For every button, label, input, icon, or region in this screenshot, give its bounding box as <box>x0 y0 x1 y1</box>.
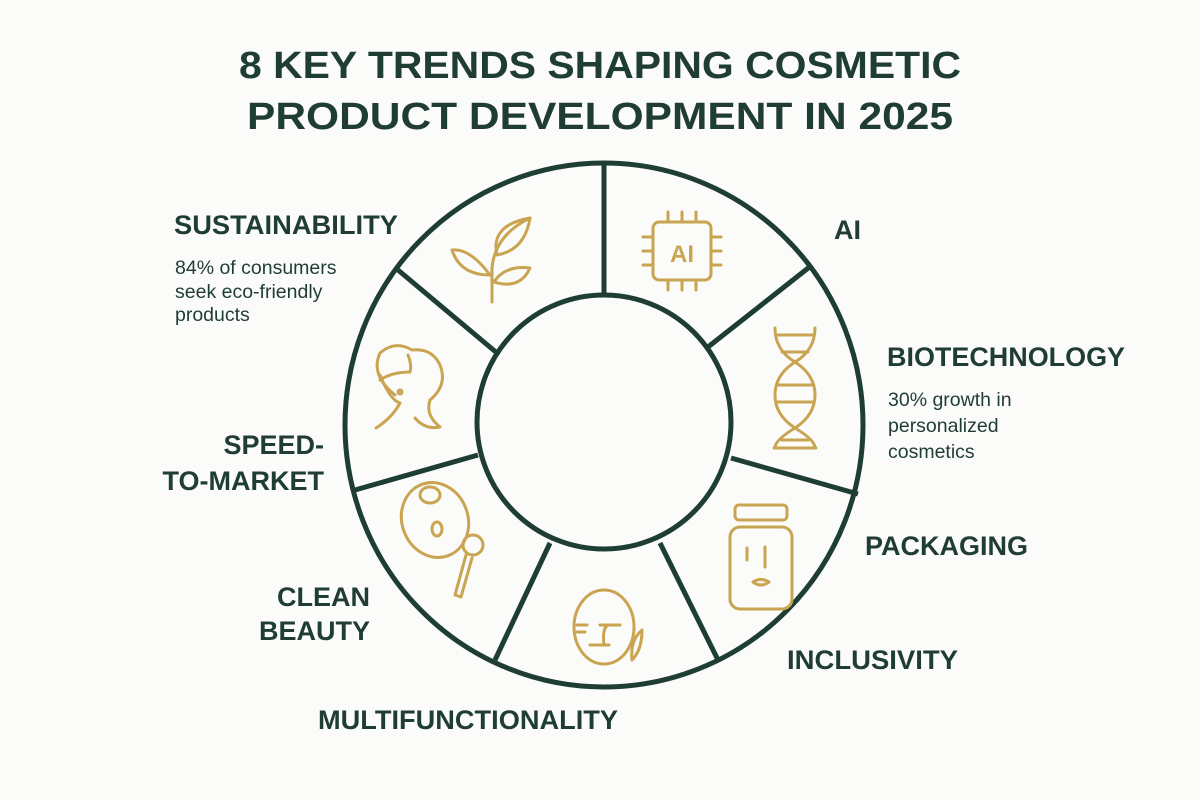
label: sustainability: 84% of consumers <box>175 257 337 279</box>
label: biotechnology <box>887 342 1125 463</box>
label: biotechnology: BIOTECHNOLOGY <box>887 342 1125 372</box>
icon: AI chip: AI <box>670 241 694 268</box>
icon: AI chip <box>643 212 721 290</box>
label: sustainability: seek eco-friendly <box>175 281 323 303</box>
ring diagram <box>345 163 863 687</box>
icon: woman <box>376 346 442 428</box>
icon: mask & brush <box>391 473 483 597</box>
label: clean beauty <box>259 582 370 646</box>
title <box>239 45 961 138</box>
icon: jar <box>730 505 792 609</box>
label: AI: AI <box>834 215 861 245</box>
icon: face <box>574 590 642 664</box>
label: speed-to-market <box>162 430 324 496</box>
label: clean beauty: BEAUTY <box>259 616 370 646</box>
label: multifunctionality: MULTIFUNCTIONALITY <box>318 705 618 735</box>
title: 8 KEY TRENDS SHAPING COSMETIC <box>239 45 961 87</box>
label: packaging: PACKAGING <box>865 531 1028 561</box>
label: sustainability: products <box>175 304 250 326</box>
icon: plant <box>452 218 530 302</box>
label: sustainability <box>174 210 398 326</box>
label: speed-to-market: TO-MARKET <box>162 466 324 496</box>
title: PRODUCT DEVELOPMENT IN 2025 <box>247 96 953 138</box>
label: biotechnology: personalized <box>888 415 999 437</box>
label: sustainability: SUSTAINABILITY <box>174 210 398 240</box>
label: biotechnology: cosmetics <box>888 441 975 463</box>
icon: DNA <box>774 328 816 448</box>
label: speed-to-market: SPEED- <box>223 430 324 460</box>
label: inclusivity: INCLUSIVITY <box>787 645 958 675</box>
label: clean beauty: CLEAN <box>277 582 370 612</box>
label: biotechnology: 30% growth in <box>888 389 1012 411</box>
